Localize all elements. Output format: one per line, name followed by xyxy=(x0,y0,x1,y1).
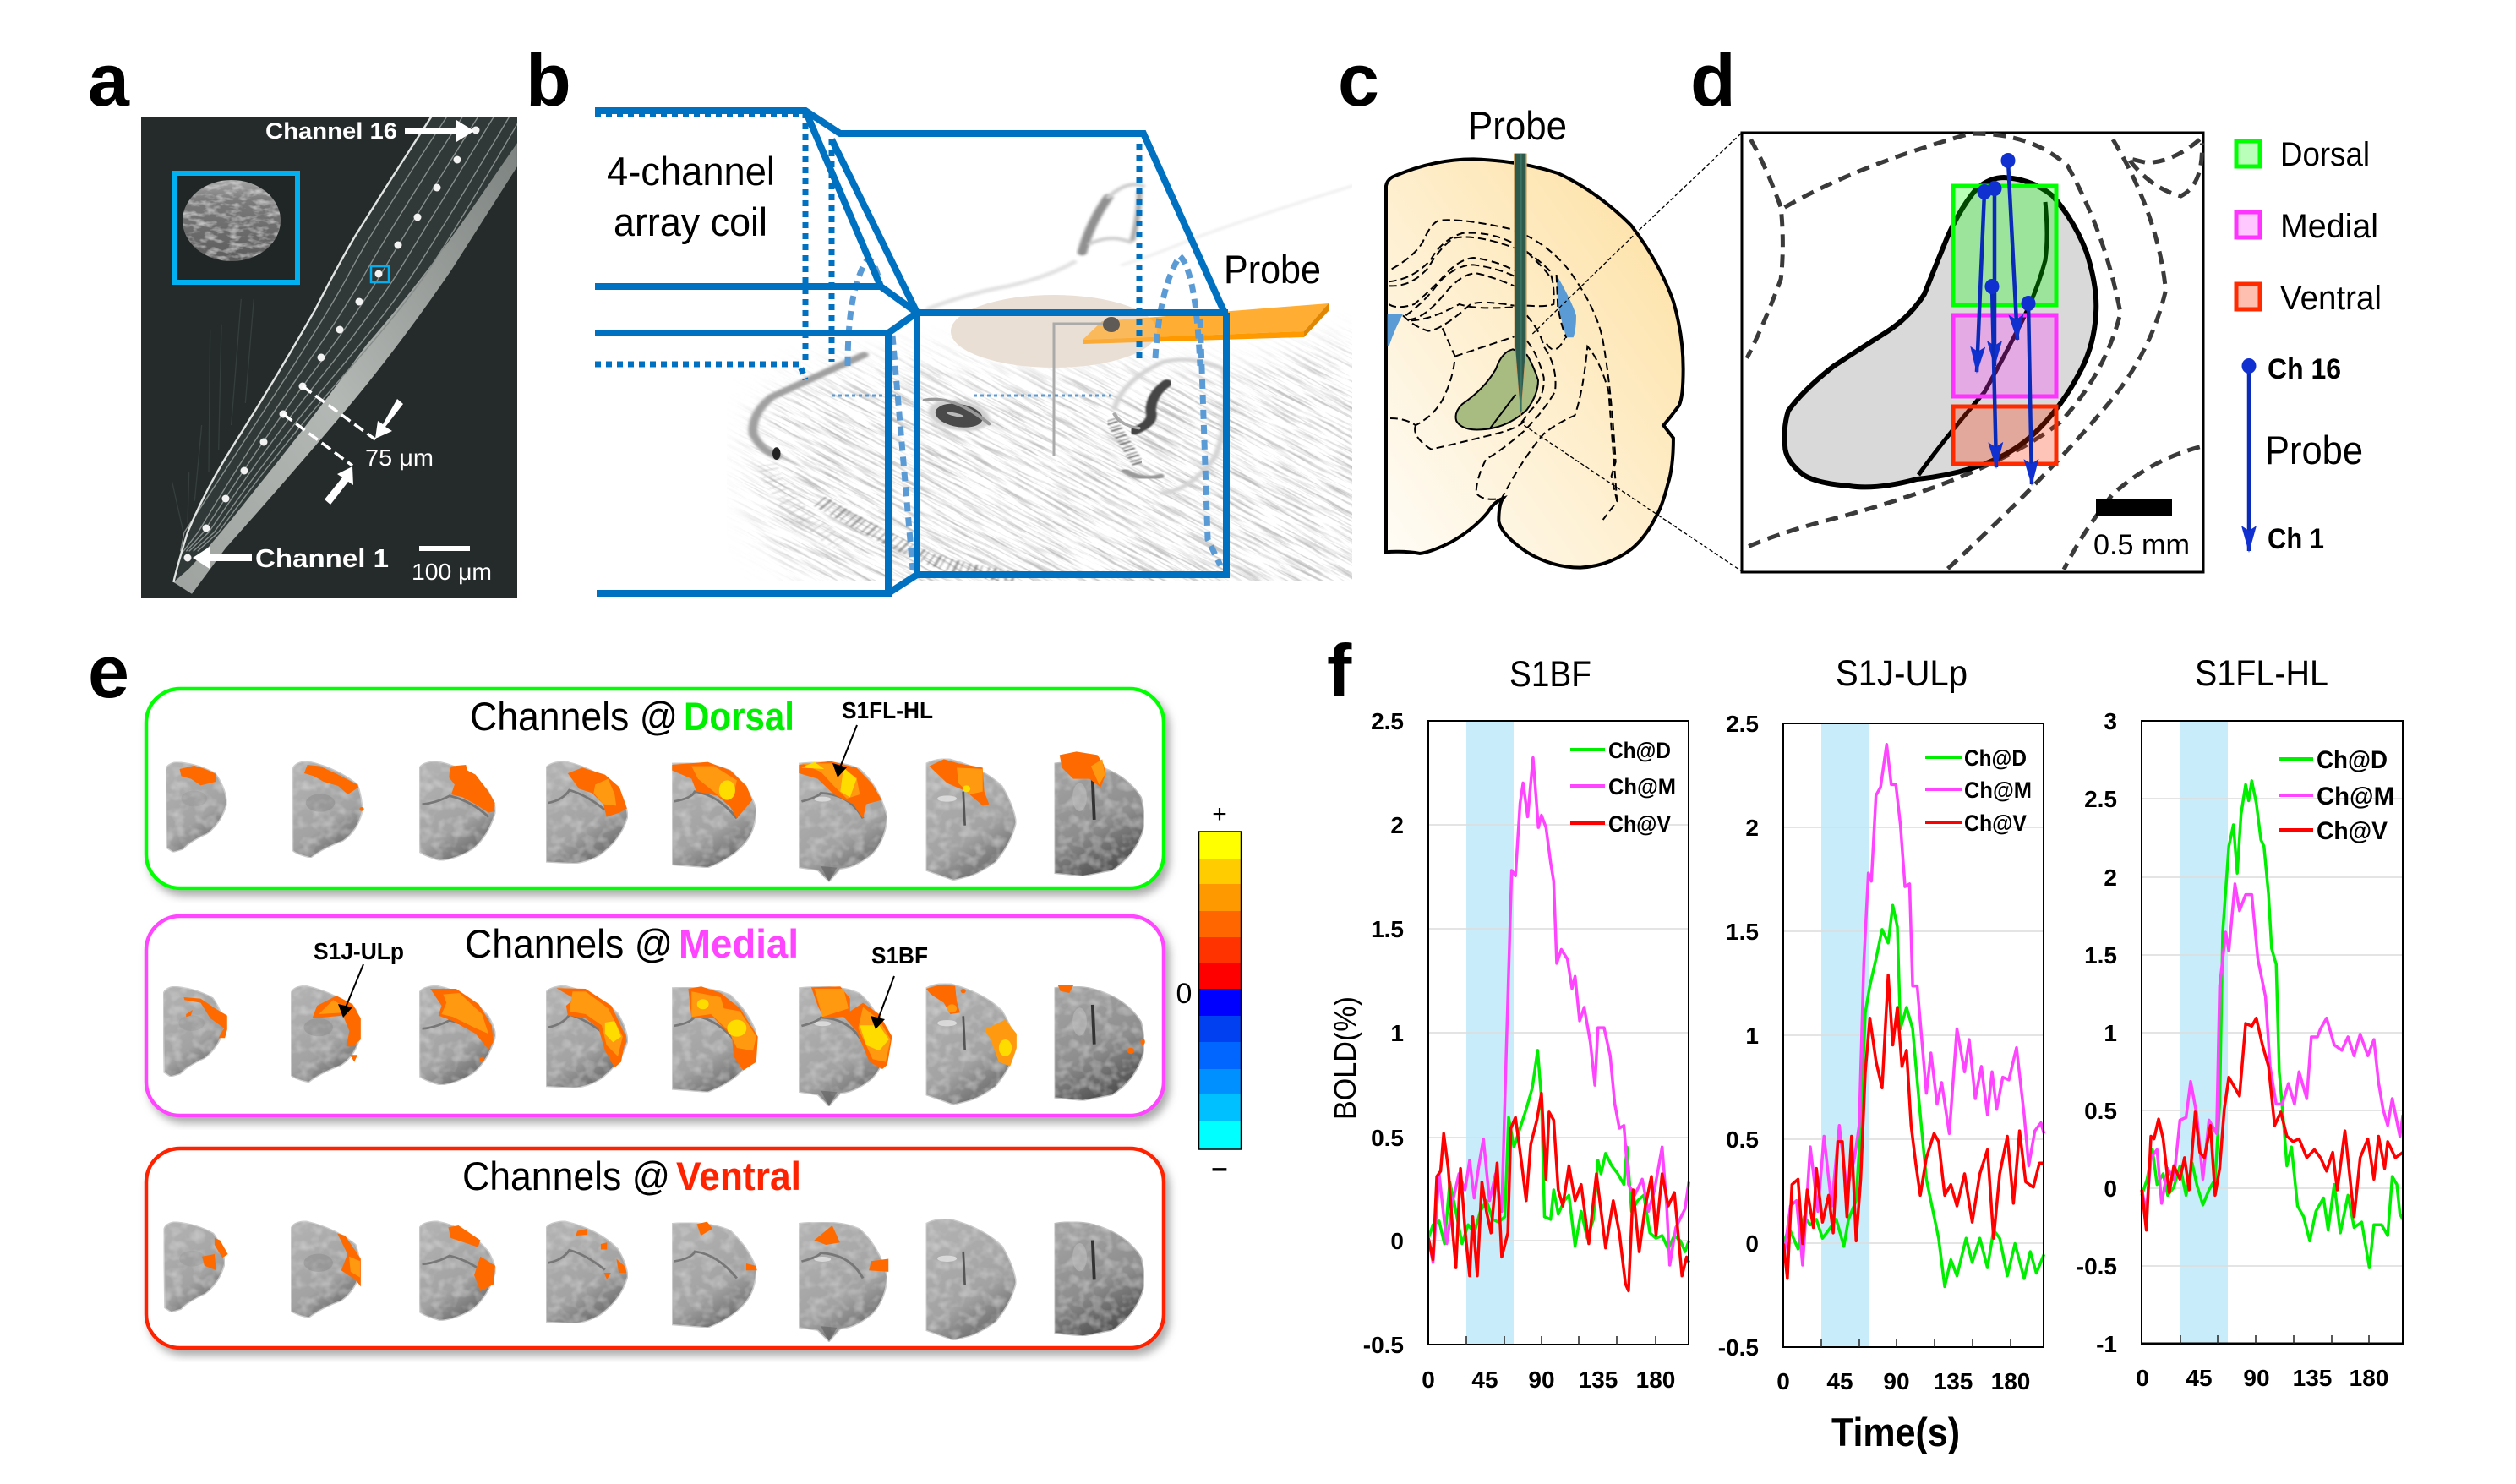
channel 1 label: Channel 1 xyxy=(255,543,389,573)
legend xyxy=(1925,745,2032,836)
channel 16 arrow xyxy=(405,120,474,142)
channel 1 arrow xyxy=(193,547,252,569)
spacing dashed lines xyxy=(283,386,375,466)
time axis title: Time(s) xyxy=(1831,1410,1960,1454)
coil label line 1: 4-channel xyxy=(607,149,775,194)
skull window disc xyxy=(951,295,1157,368)
atlas dashed boundaries xyxy=(1389,220,1617,520)
legend xyxy=(1570,738,1676,837)
x axis labels: 90 xyxy=(1528,1367,1555,1393)
medial frame xyxy=(146,916,1164,1116)
label a: a xyxy=(88,38,130,122)
x axis labels: 180 xyxy=(1636,1367,1675,1393)
chart: S1J-ULp xyxy=(1718,653,2044,1394)
scale bar xyxy=(419,546,470,551)
legend: Ch@M xyxy=(1964,777,2032,803)
dorsal frame xyxy=(146,689,1164,888)
ventral text: Ventral xyxy=(2280,280,2382,317)
lower ear xyxy=(1111,360,1226,493)
medial text: Medial xyxy=(2280,208,2378,245)
legend: Ch@V xyxy=(1964,810,2027,836)
y axis labels: -1 xyxy=(2096,1331,2117,1357)
S1BF arrow xyxy=(871,976,894,1029)
ventral region box xyxy=(1953,406,2056,464)
ventral key xyxy=(2236,284,2260,309)
zoom guide lines xyxy=(1524,133,1742,571)
y axis labels: 1 xyxy=(2104,1020,2117,1046)
y axis labels: 0.5 xyxy=(1726,1127,1759,1153)
S1FL-HL label: S1FL-HL xyxy=(842,697,933,723)
stimulus band xyxy=(1821,723,1869,1347)
legend: Ch@D xyxy=(1964,745,2027,771)
x axis labels: 135 xyxy=(2293,1365,2332,1391)
colour scale xyxy=(1176,800,1241,1184)
y axis labels xyxy=(1363,708,1404,1358)
y axis labels: -0.5 xyxy=(1363,1332,1404,1358)
stimulus band xyxy=(1466,721,1514,1345)
ch 16 text: Ch 16 xyxy=(2268,353,2341,385)
electrode sites xyxy=(184,127,480,561)
ventral slices 5-8 xyxy=(672,1219,1144,1342)
scale bar xyxy=(2096,499,2172,516)
medial heading: Medial xyxy=(679,921,799,966)
x axis labels: 135 xyxy=(1934,1368,1973,1394)
shank drawing xyxy=(172,117,521,594)
legend xyxy=(2279,746,2394,845)
S1J-ULp label: S1J-ULp xyxy=(314,938,404,964)
y axis labels: 2 xyxy=(2104,865,2117,891)
minus sign: – xyxy=(1212,1152,1227,1184)
scale text: 0.5 mm xyxy=(2093,529,2190,561)
rat eye xyxy=(923,397,991,432)
legend: Ch@D xyxy=(2317,746,2388,774)
legend: Ch@M xyxy=(1608,774,1676,799)
probe text: Probe xyxy=(2265,428,2363,472)
panel e: medial activation maps xyxy=(146,916,1164,1116)
probe key arrow xyxy=(2241,358,2257,551)
label d: d xyxy=(1690,38,1736,122)
S1J-ULp arrow xyxy=(338,964,363,1018)
y axis labels: 0.5 xyxy=(2084,1098,2117,1124)
x axis labels: 90 xyxy=(2243,1365,2270,1391)
y axis labels: 2.5 xyxy=(1726,711,1759,737)
panel a: probe micrograph xyxy=(141,117,521,598)
dorsal heading: Dorsal xyxy=(684,694,794,739)
BOLD traces xyxy=(1783,745,2044,1286)
chart: S1BF xyxy=(1363,654,1689,1393)
medial heading: Channels @ xyxy=(465,921,673,966)
label f: f xyxy=(1327,629,1352,712)
coil label line 2: array coil xyxy=(614,199,767,244)
chart: S1FL-HL xyxy=(2077,653,2403,1391)
implant site xyxy=(1103,317,1120,332)
legend: Ch@V xyxy=(2317,817,2388,845)
ventral heading: Ventral xyxy=(676,1154,801,1198)
rat sketch xyxy=(734,182,1352,581)
ventral activation spots xyxy=(202,1222,888,1291)
y axis labels xyxy=(2077,708,2117,1357)
dorsal text: Dorsal xyxy=(2280,136,2370,173)
scale text: 100 μm xyxy=(412,559,492,585)
label e: e xyxy=(88,630,129,713)
dorsal slices 1-4 xyxy=(166,761,628,864)
upper ear xyxy=(1082,184,1143,252)
y axis labels xyxy=(1718,711,1759,1361)
inset: electrode close-up xyxy=(175,173,297,282)
ventricles xyxy=(1388,275,1576,346)
ventral heading: Channels @ xyxy=(462,1154,670,1198)
panel f: BOLD y-axis title: BOLD(%) xyxy=(1328,996,1362,1120)
legend: Ch@D xyxy=(1608,738,1671,763)
panel b: rat head with coil xyxy=(595,107,1352,597)
orange probe holder xyxy=(1083,303,1329,344)
stimulus band xyxy=(2180,721,2228,1344)
dorsal heading: Channels @ xyxy=(470,694,678,739)
channel 16 label: Channel 16 xyxy=(265,118,397,144)
dorsal heading xyxy=(470,694,794,739)
inset marker square xyxy=(371,266,389,282)
y axis labels: 0 xyxy=(1390,1228,1404,1254)
spacing text: 75 μm xyxy=(365,445,434,471)
x axis labels: 135 xyxy=(1579,1367,1618,1393)
label c: c xyxy=(1338,38,1379,122)
dorsal region box xyxy=(1953,186,2056,305)
BOLD traces xyxy=(2142,781,2403,1268)
x axis labels xyxy=(1776,1368,2030,1394)
label b: b xyxy=(526,38,571,122)
probe tracks xyxy=(1977,161,2032,484)
x axis labels: 45 xyxy=(1471,1367,1498,1393)
target region xyxy=(1455,349,1538,430)
y axis labels: 1 xyxy=(1745,1023,1759,1049)
dotted coil back xyxy=(595,114,1220,570)
dorsal key xyxy=(2236,141,2260,166)
probe heads xyxy=(1978,153,2035,311)
y axis labels: 2.5 xyxy=(1371,708,1404,734)
panel e: ventral activation maps xyxy=(146,1148,1164,1348)
x axis labels xyxy=(2136,1365,2388,1391)
x axis labels: 0 xyxy=(1776,1368,1790,1394)
chart title: S1BF xyxy=(1509,654,1591,695)
y axis labels: -0.5 xyxy=(2077,1253,2117,1279)
x axis labels: 0 xyxy=(1422,1367,1435,1393)
ventral frame xyxy=(146,1148,1164,1348)
medial region box xyxy=(1953,315,2056,396)
mouth whiskers xyxy=(767,465,1018,577)
plus sign: + xyxy=(1212,800,1227,828)
legend: Ch@M xyxy=(2317,783,2394,810)
y axis labels: 2.5 xyxy=(2084,786,2117,812)
legend: Ch@V xyxy=(1608,811,1671,837)
x axis labels: 180 xyxy=(2350,1365,2388,1391)
probe label: Probe xyxy=(1468,103,1567,148)
medial heading xyxy=(465,921,799,966)
legend: regions and probe xyxy=(2236,136,2382,555)
colour bar xyxy=(1198,832,1241,1149)
y axis labels: -0.5 xyxy=(1718,1334,1759,1361)
panel e: dorsal activation maps xyxy=(146,689,1164,888)
x axis labels: 0 xyxy=(2136,1365,2149,1391)
x axis labels xyxy=(1422,1367,1675,1393)
medial slices 5-8 xyxy=(672,984,1145,1106)
chart title: S1FL-HL xyxy=(2195,653,2328,694)
ventral slices 1-4 xyxy=(164,1221,628,1323)
probe label: Probe xyxy=(1224,247,1321,292)
y axis labels: 1.5 xyxy=(1371,916,1404,942)
y axis labels: 1 xyxy=(1390,1020,1404,1046)
y axis labels: 2 xyxy=(1745,815,1759,841)
dorsal slices 5-8 xyxy=(672,751,1144,881)
x axis labels: 45 xyxy=(1826,1368,1853,1394)
rat nose xyxy=(772,447,781,460)
probe track xyxy=(1054,324,1103,456)
y axis labels: 1.5 xyxy=(1726,919,1759,945)
y axis labels: 2 xyxy=(1390,812,1404,838)
section outline xyxy=(1386,159,1684,568)
striatum region xyxy=(1785,177,2096,487)
y axis labels: 3 xyxy=(2104,708,2117,734)
spacing arrows xyxy=(325,399,403,505)
BOLD traces xyxy=(1428,758,1689,1290)
y axis labels: 0 xyxy=(1745,1230,1759,1257)
probe shaft xyxy=(1514,154,1527,418)
medial key xyxy=(2236,212,2260,237)
inner boundary xyxy=(1918,202,2047,475)
panel c: coronal brain section xyxy=(1386,103,1742,571)
x axis labels: 45 xyxy=(2186,1365,2213,1391)
y axis labels: 0.5 xyxy=(1371,1125,1404,1151)
x axis labels: 90 xyxy=(1883,1368,1910,1394)
y axis labels: 0 xyxy=(2104,1176,2117,1202)
medial slices 1-4 xyxy=(163,985,628,1088)
zero: 0 xyxy=(1176,978,1192,1010)
x axis labels: 180 xyxy=(1991,1368,2030,1394)
y axis labels: 1.5 xyxy=(2084,942,2117,968)
array coil frame xyxy=(595,111,1228,593)
S1FL-HL arrow xyxy=(832,725,857,777)
S1BF label: S1BF xyxy=(871,942,928,968)
ventral heading xyxy=(462,1154,801,1198)
head and back contours xyxy=(753,186,1352,456)
dashed atlas lines xyxy=(1744,134,2202,570)
ch 1 text: Ch 1 xyxy=(2268,523,2324,555)
panel d: enlarged striatum with probe tracks xyxy=(1742,133,2203,572)
chart title: S1J-ULp xyxy=(1836,653,1968,694)
frame xyxy=(1742,133,2203,572)
